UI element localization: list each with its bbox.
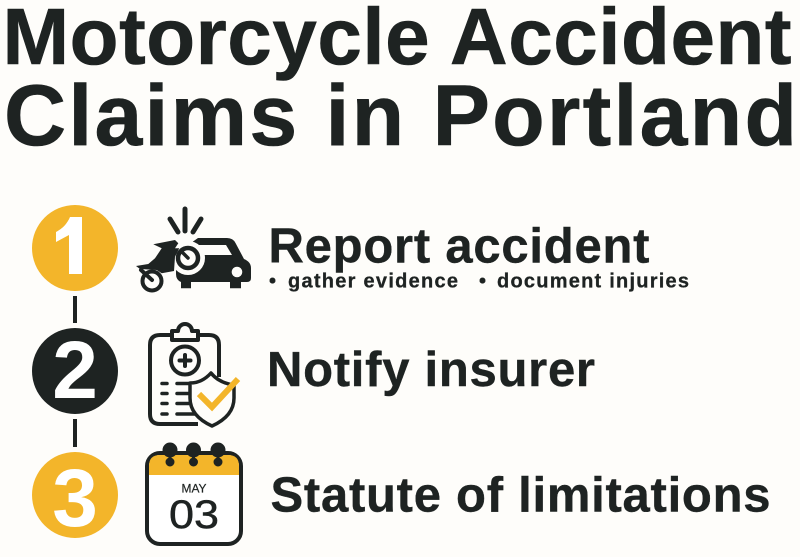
step 1 number badge <box>32 201 118 292</box>
icon: calendar rings <box>163 443 225 466</box>
icon: impact lines <box>170 209 201 232</box>
icon: clipboard outline <box>150 335 219 424</box>
icon: clipboard with medical cross and shield <box>150 324 238 426</box>
step 1 details: • <box>269 270 276 292</box>
icon: car headlight <box>232 267 242 277</box>
icon: shield <box>190 373 234 426</box>
icon: calendar <box>147 443 241 544</box>
step 1 heading: Report accident <box>268 220 650 274</box>
step 1 details: • <box>479 270 486 292</box>
icon: white halo around front wheel <box>171 241 205 275</box>
icon: motorcycle wheels <box>141 248 198 290</box>
icon: medical cross <box>171 346 199 374</box>
title <box>2 0 797 164</box>
icon: list lines <box>162 384 195 414</box>
title: Claims in Portland <box>4 68 797 164</box>
step 3 heading: Statute of limitations <box>270 468 770 522</box>
calendar month: MAY <box>182 482 206 496</box>
step 1 details <box>269 270 689 292</box>
icon: clipboard clip <box>172 324 198 340</box>
step 3 number badge <box>32 452 118 544</box>
icon: motorcycle body <box>136 240 179 273</box>
icon: yellow check mark <box>199 379 238 407</box>
icon: calendar page <box>147 453 241 544</box>
icon: motorcycle crashing into car <box>136 209 251 290</box>
calendar day: 03 <box>169 493 219 537</box>
icon: car body <box>176 238 251 288</box>
icon: calendar yellow header <box>149 455 239 475</box>
step 3 number badge: 3 <box>52 453 98 544</box>
step 1 details: gather evidence <box>288 270 458 292</box>
step 2 heading: Notify insurer <box>267 343 595 397</box>
step 2 number badge: 2 <box>52 325 98 416</box>
step 1 number badge: 1 <box>52 201 98 292</box>
connector lines <box>73 296 77 447</box>
icon: car windshield <box>197 245 232 255</box>
step 2 number badge <box>32 325 118 416</box>
step 1 details: document injuries <box>497 270 689 292</box>
